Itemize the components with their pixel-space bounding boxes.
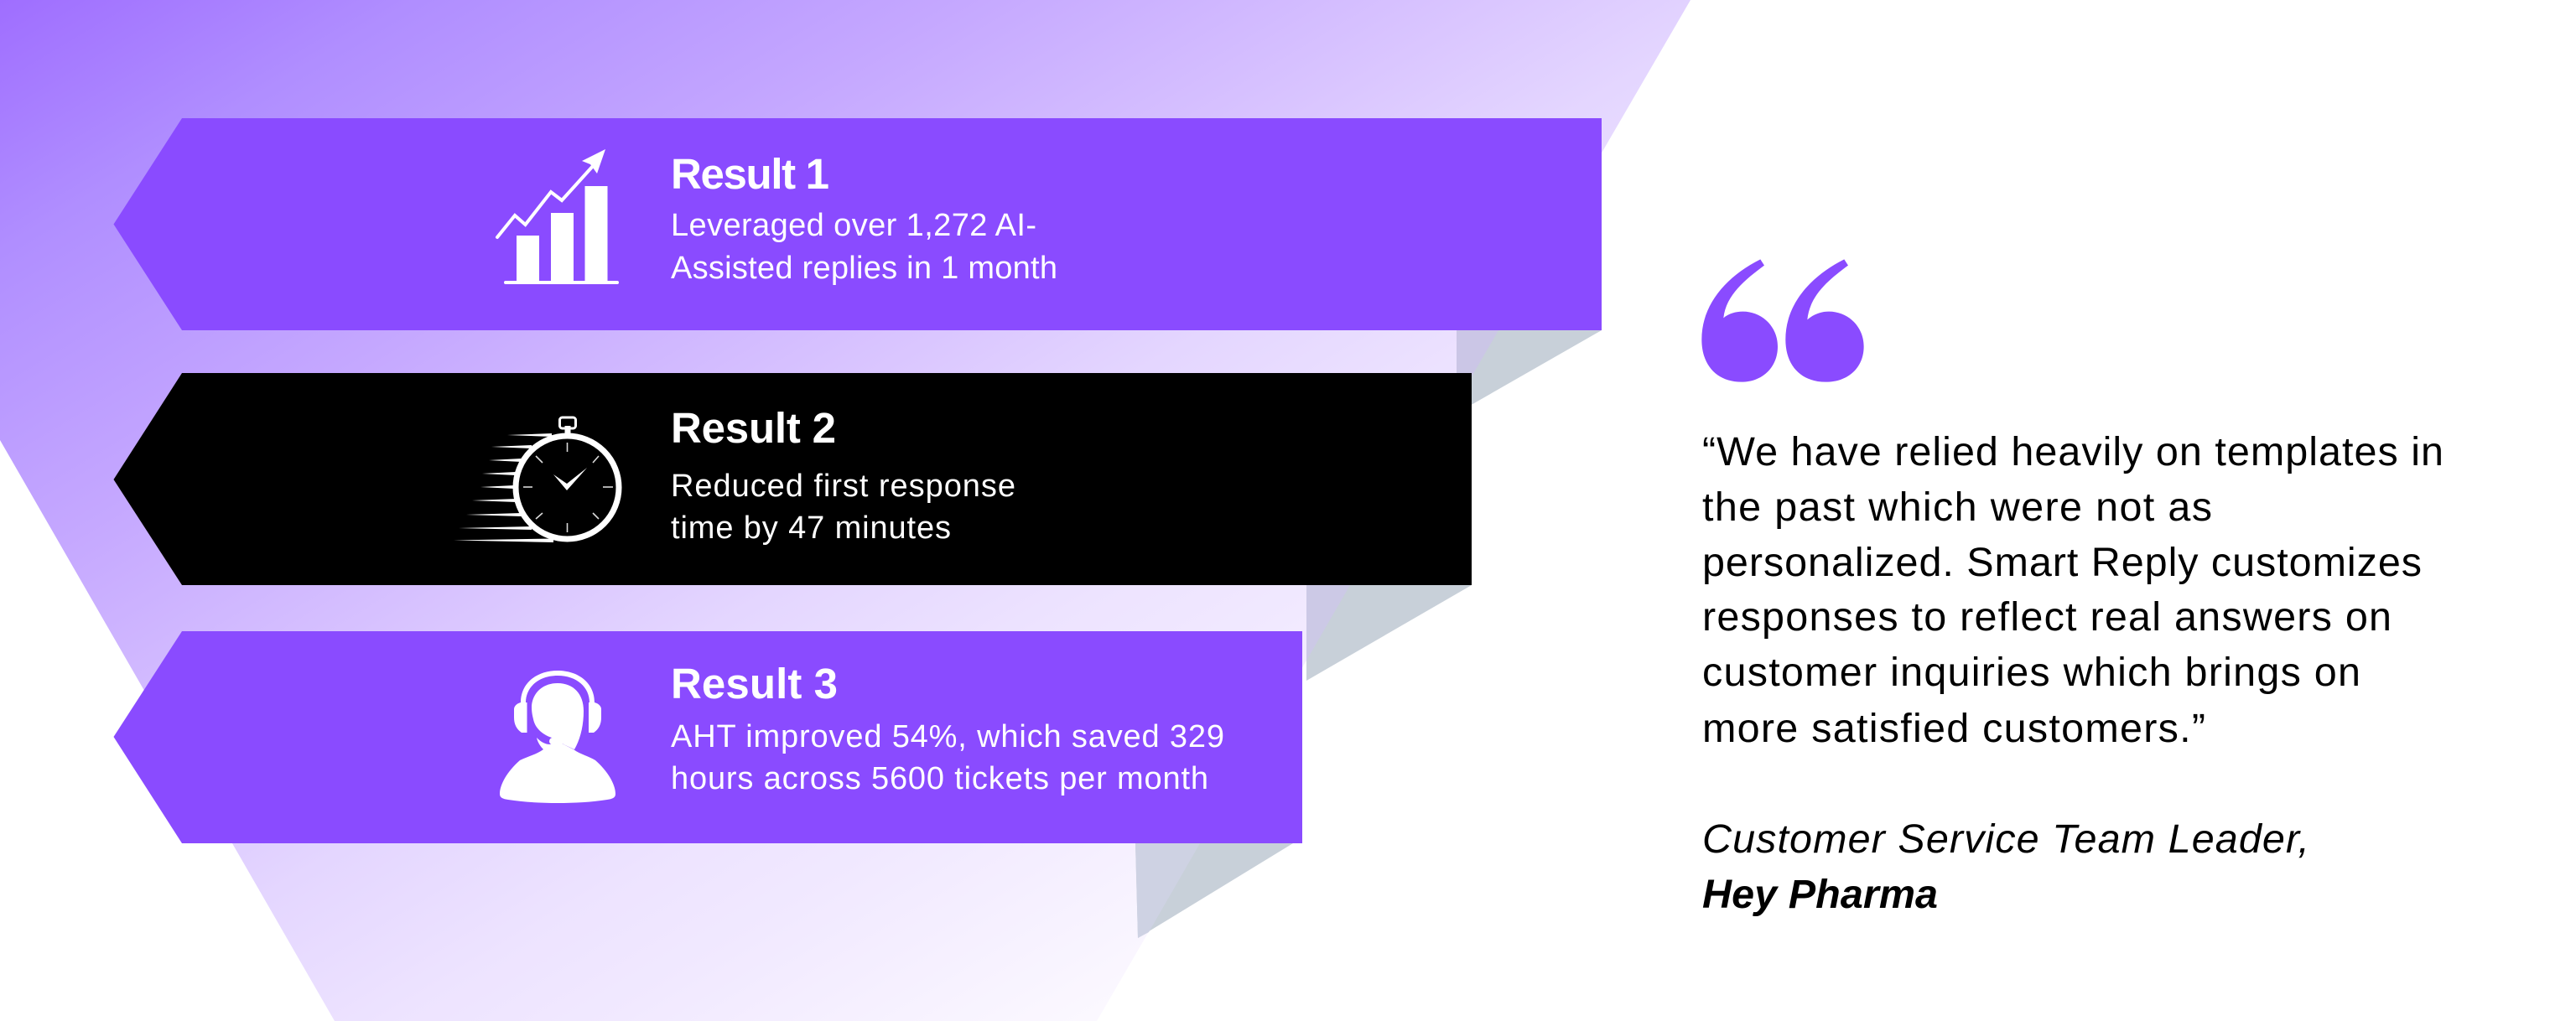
text: customer quote: “We have relied heavily on templates in <box>1702 429 2444 474</box>
text: customer quote: more satisfied customers.” <box>1702 706 2205 751</box>
panel: result 1 <box>114 118 1602 330</box>
text: result 1 description: Leveraged over 1,272 AI- <box>671 208 1036 243</box>
text: result 3 description <box>671 719 1224 796</box>
text: quote attribution: Customer Service Team Leader, <box>1702 816 2309 862</box>
text: customer quote: responses to reflect real answers on <box>1702 594 2392 640</box>
text: quote attribution: Hey Pharma <box>1702 872 1938 917</box>
text: result 1 description: Assisted replies in 1 month <box>671 251 1057 286</box>
panel: result 2 <box>114 373 1472 585</box>
heading: result 2: Result 2 <box>671 404 836 452</box>
shadow under result 2 <box>1306 585 1472 681</box>
funnel background <box>0 0 1690 1021</box>
shadow under result 1 <box>1457 330 1602 413</box>
icon: rising bar chart <box>497 149 619 284</box>
banner: result 2 <box>114 373 1472 585</box>
heading: result 1: Result 1 <box>671 150 829 198</box>
icon: support agent with headset <box>500 671 615 803</box>
text: result 3 description: AHT improved 54%, which saved 329 <box>671 719 1224 754</box>
banner: result 3 <box>114 631 1302 843</box>
text: result 2 description: Reduced first response <box>671 469 1015 504</box>
text: customer quote: customer inquiries which brings on <box>1702 650 2360 695</box>
text: result 3 description: hours across 5600 tickets per month <box>671 761 1208 796</box>
text: result 2 description <box>671 469 1015 546</box>
text: customer quote: the past which were not as <box>1702 485 2212 530</box>
text: customer quote <box>1702 429 2444 751</box>
icon: stopwatch with speed lines <box>454 417 619 542</box>
text: result 2 description: time by 47 minutes <box>671 510 951 546</box>
icon: quotation mark <box>1701 259 1864 382</box>
text: customer quote: personalized. Smart Reply customizes <box>1702 540 2422 585</box>
text: quote attribution <box>1702 816 2309 917</box>
heading: result 3: Result 3 <box>671 660 838 707</box>
banner: result 1 <box>114 118 1602 330</box>
text: result 1 description <box>671 208 1057 286</box>
panel: result 3 <box>114 631 1302 843</box>
shadow under result 3 <box>1135 843 1293 938</box>
